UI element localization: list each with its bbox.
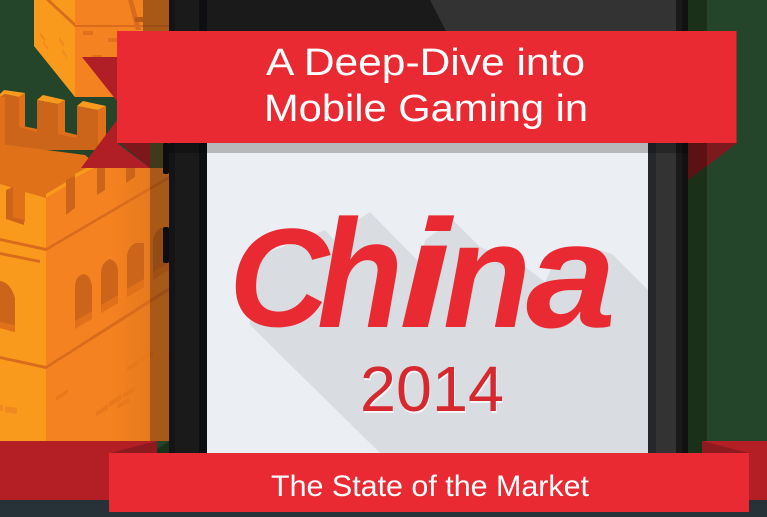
ribbon fold: top banner right — [688, 143, 737, 180]
windows — [75, 274, 92, 329]
ribbon: bottom banner right — [702, 441, 767, 500]
title line two: Mobile Gaming in — [264, 88, 588, 130]
year: 2014 — [361, 355, 505, 427]
title banner — [117, 31, 736, 143]
icon: lower castle tower — [0, 90, 169, 453]
heading: China — [229, 188, 616, 360]
horizontal mouldings — [0, 238, 46, 251]
heading: China: a — [526, 191, 616, 359]
ribbon folds: top banner left — [81, 57, 150, 168]
panel: phone screen — [207, 143, 648, 453]
heading: China: i — [399, 188, 455, 360]
long shadow of title word — [250, 212, 648, 453]
icon: upper castle tower — [34, 0, 169, 97]
year: 2014 — [360, 353, 504, 425]
parapet caps and notches — [46, 182, 66, 198]
heading: China: C — [229, 199, 331, 356]
ground strip — [0, 500, 767, 517]
subtitle banner: The State of the Market — [271, 470, 590, 503]
bricks — [56, 389, 68, 401]
heading: China: n — [443, 191, 531, 359]
parapet left face — [0, 184, 46, 248]
back wall with merlons — [0, 94, 98, 150]
tower shade — [150, 143, 169, 441]
ribbon: bottom banner left — [0, 441, 157, 500]
panel: phone body — [163, 0, 688, 453]
subtitle banner — [109, 453, 749, 512]
tower floor — [0, 144, 100, 240]
tower walls — [46, 168, 169, 441]
title line one: A Deep-Dive into — [266, 42, 585, 84]
heading: China: h — [317, 188, 403, 360]
